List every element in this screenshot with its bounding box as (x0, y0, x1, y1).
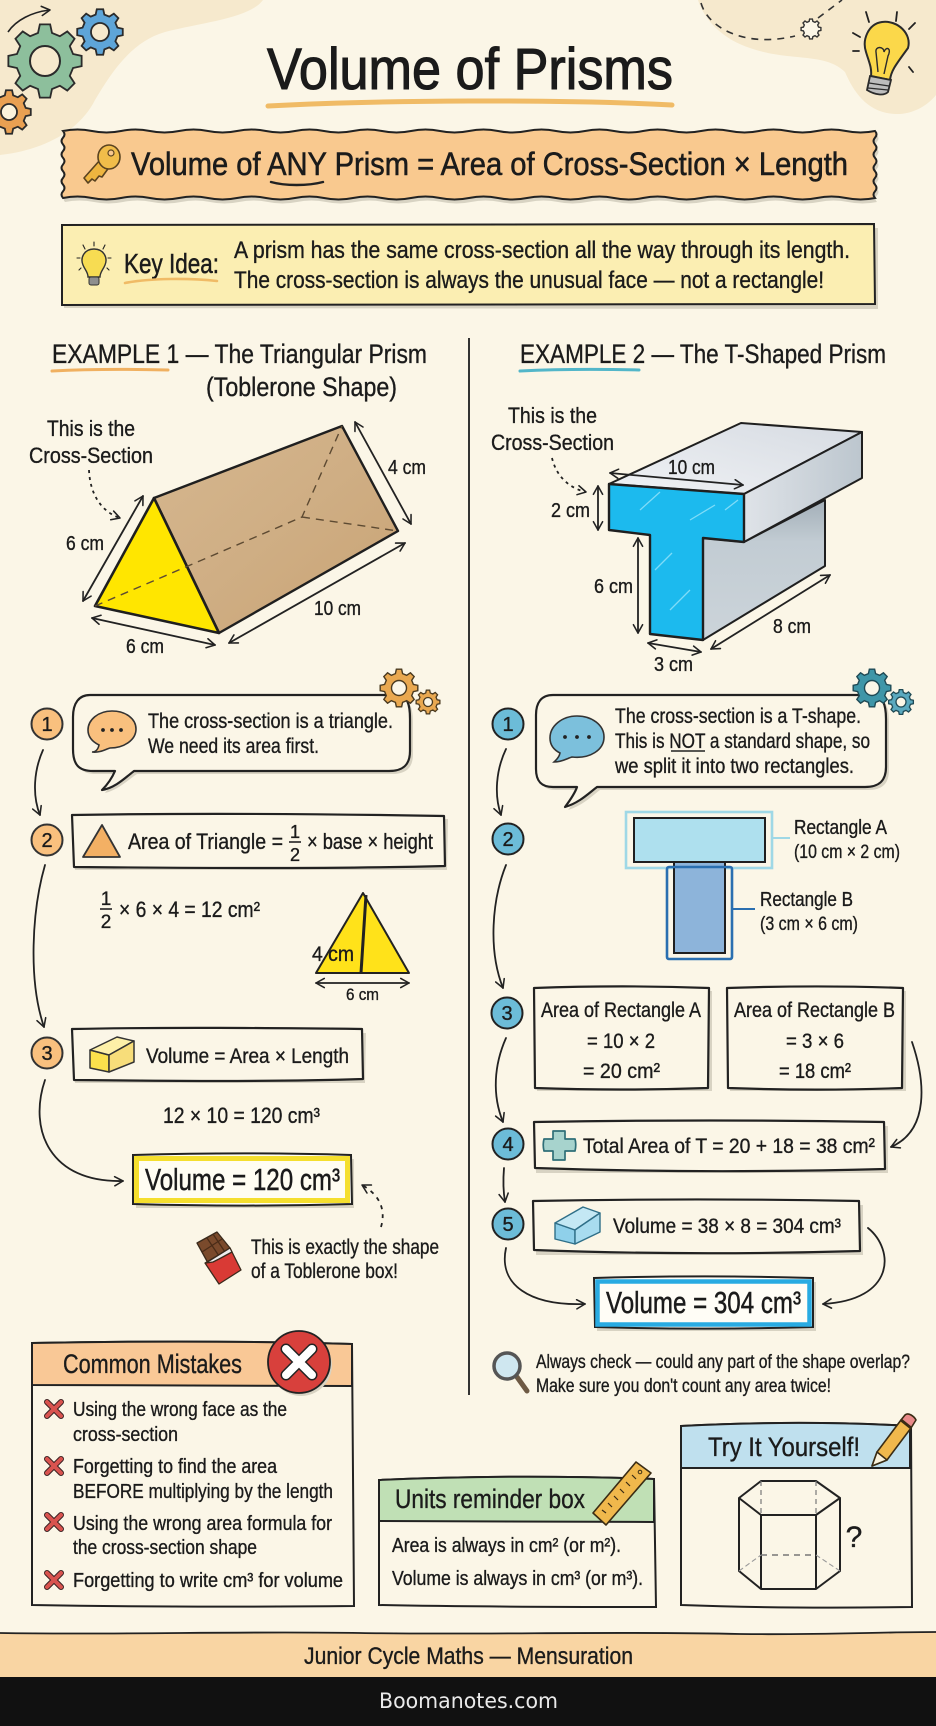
calculation: triangle area: × 6 × 4 = 12 cm² (119, 897, 260, 922)
result box: volume 304 (594, 1276, 816, 1331)
note: overlap check (536, 1352, 910, 1397)
arrow: step 1 to 2 left (35, 750, 43, 815)
arrow: volume box to result (823, 1228, 885, 1304)
cross-section callout: Cross-Section (29, 443, 153, 468)
heading: example 1: (Toblerone Shape) (206, 372, 397, 402)
diagram: T-shaped prism: 8 cm (773, 616, 811, 638)
step 2 right: number badge: 2 (502, 829, 514, 851)
step 1 left: speech bubble: The cross-section is a triangle. (148, 710, 393, 733)
watermark bar (0, 1677, 936, 1726)
step 1 left: speech bubble: We need its area first. (148, 735, 319, 758)
box: area of rectangle B: = 18 cm² (779, 1060, 851, 1083)
box: area of rectangle B (727, 986, 906, 1091)
diagram: hexagonal prism (739, 1481, 840, 1589)
key idea panel (62, 224, 878, 309)
mistake 1 (47, 1399, 287, 1446)
step 2 left: formula box: Area of Triangle = (128, 829, 283, 854)
panel: common mistakes (32, 1331, 354, 1607)
icon: chat bubble (550, 716, 604, 762)
box: area of rectangle A: = 20 cm² (583, 1060, 660, 1083)
panel: example 2 (491, 339, 886, 676)
diagram: T split into rectangles: (10 cm × 2 cm) (794, 842, 900, 863)
step 1 right: speech bubble: This is NOT a standard shape, so (615, 730, 870, 753)
step 5: number badge: 5 (502, 1214, 514, 1236)
icon: small bulb (77, 242, 111, 285)
arrow: step 3 to 4 right (496, 1038, 506, 1122)
calculation: triangle area: 1 (101, 889, 111, 910)
question mark: ? (846, 1521, 862, 1554)
diagram: small triangle (312, 893, 409, 1004)
icon: red cross badge (268, 1331, 332, 1396)
step 1 right: speech bubble (536, 695, 889, 810)
box: area of rectangle B: = 3 × 6 (786, 1030, 844, 1053)
icon: orange triangle (83, 825, 120, 857)
mistake 1: Using the wrong face as the (73, 1399, 287, 1421)
diagram: T-shaped prism: 3 cm (654, 654, 693, 676)
panel: units reminder (379, 1462, 656, 1607)
step 3 left: number badge: 3 (41, 1043, 53, 1065)
icon: plus (543, 1131, 576, 1160)
diagram: triangular prism: 4 cm (388, 457, 426, 479)
step 4: total area box: Total Area of T = 20 + 18 = 38 cm² (583, 1135, 875, 1158)
watermark bar: Boomanotes.com (379, 1689, 558, 1713)
key idea label: Key Idea: (124, 248, 219, 279)
mistake 2: Forgetting to find the area (73, 1456, 278, 1478)
icon: magnifying glass (494, 1353, 527, 1391)
calculation: volume: 12 × 10 = 120 cm³ (163, 1103, 320, 1128)
key idea line 1: A prism has the same cross-section all the way through its length. (234, 237, 850, 264)
step 2 left: formula box (72, 814, 448, 870)
column divider (468, 338, 470, 1395)
mistake 3: the cross-section shape (73, 1537, 257, 1559)
diagram: T-shaped prism (551, 423, 862, 676)
step 1 left: number badge (32, 708, 62, 740)
heading: example 1: EXAMPLE 1 — The Triangular Prism (52, 339, 427, 369)
step 5: volume box: Volume = 38 × 8 = 304 cm³ (613, 1215, 841, 1238)
icon: light bulb top right (853, 12, 915, 94)
formula text: Volume of ANY Prism = Area of Cross-Section × Length (131, 146, 848, 182)
diagram: T split into rectangles: (3 cm × 6 cm) (760, 914, 858, 935)
icon: blue block (555, 1207, 600, 1244)
arrow: rectangle B to total (891, 1042, 921, 1147)
units line 1: Area is always in cm² (or m²). (392, 1535, 621, 1557)
calculation: triangle area: 2 (101, 912, 111, 933)
icon: yellow block (90, 1037, 134, 1072)
diagram: small triangle: 6 cm (346, 985, 379, 1004)
result box: volume 304: Volume = 304 cm³ (606, 1285, 801, 1320)
arrow: step 1 to 2 right (497, 749, 506, 815)
step 1 right: speech bubble: we split it into two rectangles. (614, 755, 854, 778)
note: toblerone (251, 1236, 439, 1283)
box: area of rectangle A: Area of Rectangle A (541, 999, 701, 1022)
panel: example 1 (29, 339, 427, 658)
step 3 left: formula box (72, 1028, 366, 1083)
cross-section callout: This is the (508, 403, 597, 428)
icon: chocolate bar (197, 1232, 241, 1284)
cross-section callout (491, 403, 614, 492)
calculation: triangle area (100, 889, 260, 933)
diagram: T-shaped prism: 2 cm (551, 500, 590, 522)
step 1 right: speech bubble: The cross-section is a T-shape. (615, 705, 861, 728)
mistake 2: BEFORE multiplying by the length (73, 1481, 333, 1503)
step 2 left: number badge: 2 (41, 830, 53, 852)
mistake 3: Using the wrong area formula for (73, 1513, 332, 1535)
footer band: Junior Cycle Maths — Mensuration (304, 1643, 633, 1670)
heading: try it yourself: Try It Yourself! (708, 1432, 860, 1462)
note: overlap check: Make sure you don't count any area twice! (536, 1376, 831, 1397)
mistake 2 (47, 1456, 333, 1503)
arrow: step 5 to result (505, 1248, 585, 1304)
heading: example 1 (52, 339, 427, 402)
arrow: step 2 to 3 right (493, 865, 506, 988)
icon: key (84, 145, 120, 183)
diagram: small triangle: 4 cm (312, 943, 354, 966)
diagram: T split into rectangles: Rectangle A (794, 817, 888, 839)
icon: dashed path with small gear (701, 0, 842, 40)
diagram: T-shaped prism: 6 cm (594, 576, 633, 598)
step 3 right: number badge: 3 (501, 1003, 513, 1025)
step 2 right: number badge (492, 824, 524, 854)
heading: common mistakes: Common Mistakes (63, 1349, 242, 1379)
heading: units reminder: Units reminder box (395, 1484, 585, 1514)
icon: teal gears (853, 669, 913, 714)
cross-section callout (29, 416, 153, 518)
step 3 left: number badge (32, 1038, 62, 1068)
arrow: toblerone note (362, 1185, 383, 1227)
diagram: T split into rectangles: Rectangle B (760, 889, 853, 911)
cross-section callout: Cross-Section (491, 430, 614, 455)
step 1 right: number badge: 1 (502, 714, 514, 736)
box: area of rectangle A (534, 986, 712, 1091)
diagram: T split into rectangles (626, 812, 900, 959)
step 1 left: number badge: 1 (41, 714, 53, 736)
cross-section callout: This is the (47, 416, 135, 441)
step 3 left: formula box: Volume = Area × Length (146, 1045, 349, 1068)
step 3 right: number badge (492, 998, 522, 1028)
arrow: step 2 to 3 left (34, 865, 45, 1027)
step 4: number badge: 4 (502, 1134, 514, 1156)
arrow: step 4 to 5 (503, 1168, 505, 1202)
decorative corner blob right (698, 0, 936, 114)
step 2 left: number badge (32, 824, 62, 856)
note: toblerone: This is exactly the shape (251, 1236, 439, 1259)
icon: gears top left (0, 9, 123, 134)
box: area of rectangle B: Area of Rectangle B (734, 999, 895, 1022)
box: area of rectangle A: = 10 × 2 (587, 1030, 655, 1053)
diagram: T-shaped prism: 10 cm (668, 457, 715, 479)
step 1 left: speech bubble (73, 695, 413, 793)
step 5: number badge (492, 1208, 524, 1240)
step 2 left: formula box: × base × height (307, 829, 433, 854)
units line 2: Volume is always in cm³ (or m³). (392, 1568, 643, 1590)
icon: orange gears (380, 669, 440, 714)
result box: volume 120 (133, 1154, 354, 1208)
note: toblerone: of a Toblerone box! (251, 1260, 398, 1283)
mistake 1: cross-section (73, 1424, 178, 1446)
decorative corner blob left (0, 0, 263, 155)
step 2 left: formula box: 2 (290, 845, 300, 865)
icon: chat bubble (88, 711, 136, 752)
title: Volume of Prisms (267, 37, 673, 102)
result box: volume 120: Volume = 120 cm³ (145, 1162, 340, 1197)
step 2 left: formula box: 1 (290, 822, 300, 842)
step 5: volume box (533, 1200, 863, 1255)
panel: try it yourself (681, 1414, 916, 1608)
diagram: triangular prism: 10 cm (314, 598, 361, 620)
step 4: total area box (534, 1120, 888, 1173)
diagram: triangular prism: 6 cm (66, 533, 104, 555)
mistake 4: Forgetting to write cm³ for volume (73, 1570, 343, 1592)
title underline (268, 101, 672, 106)
step 1 right: number badge (492, 708, 524, 740)
diagram: triangular prism (66, 422, 426, 658)
formula banner (62, 130, 878, 203)
footer band (0, 1632, 936, 1677)
icon: pencil (872, 1414, 916, 1466)
key idea line 2: The cross-section is always the unusual face — not a rectangle! (234, 267, 824, 294)
step 4: number badge (492, 1128, 524, 1160)
arrow: step 3 to result left (40, 1080, 123, 1181)
icon: ruler (593, 1462, 651, 1525)
diagram: triangular prism: 6 cm (126, 636, 164, 658)
mistake 3 (47, 1513, 332, 1559)
